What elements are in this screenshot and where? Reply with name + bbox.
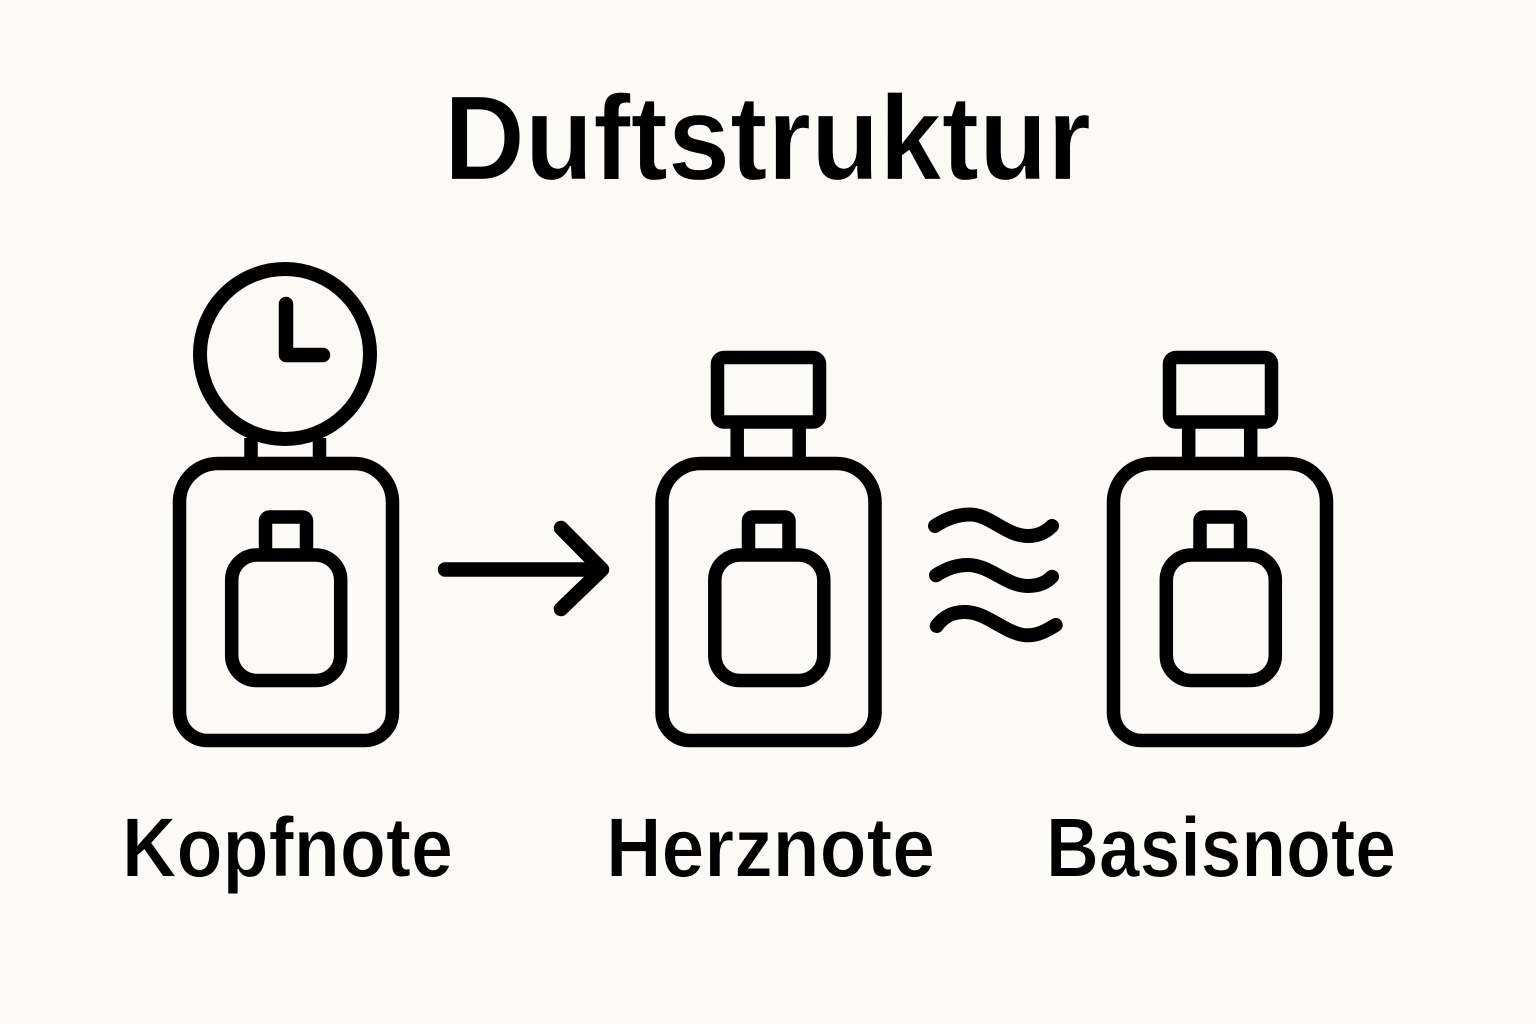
bottle body [662,464,875,740]
bottle neck [1189,428,1251,458]
bottle neck [737,428,799,458]
small inner bottle [232,517,341,680]
small inner bottle [715,517,824,680]
title: Duftstruktur [444,70,1091,206]
bottle body [1114,464,1326,740]
icon: Basisnote bottle [1114,358,1326,740]
arrow [445,528,602,609]
label: Basisnote: Basisnote [1046,800,1396,894]
bottle body [180,464,392,740]
bottle cap [718,358,820,422]
label: Herznote: Herznote [606,800,935,894]
bottle cap [1170,358,1272,422]
label: Kopfnote: Kopfnote [122,800,453,894]
small inner bottle [1166,517,1275,680]
icon: scent waves [935,514,1056,635]
icon: Kopfnote bottle with clock [180,269,392,740]
icon: Herznote bottle [662,358,875,740]
bottle neck [251,438,320,458]
icon: clock [200,269,370,439]
